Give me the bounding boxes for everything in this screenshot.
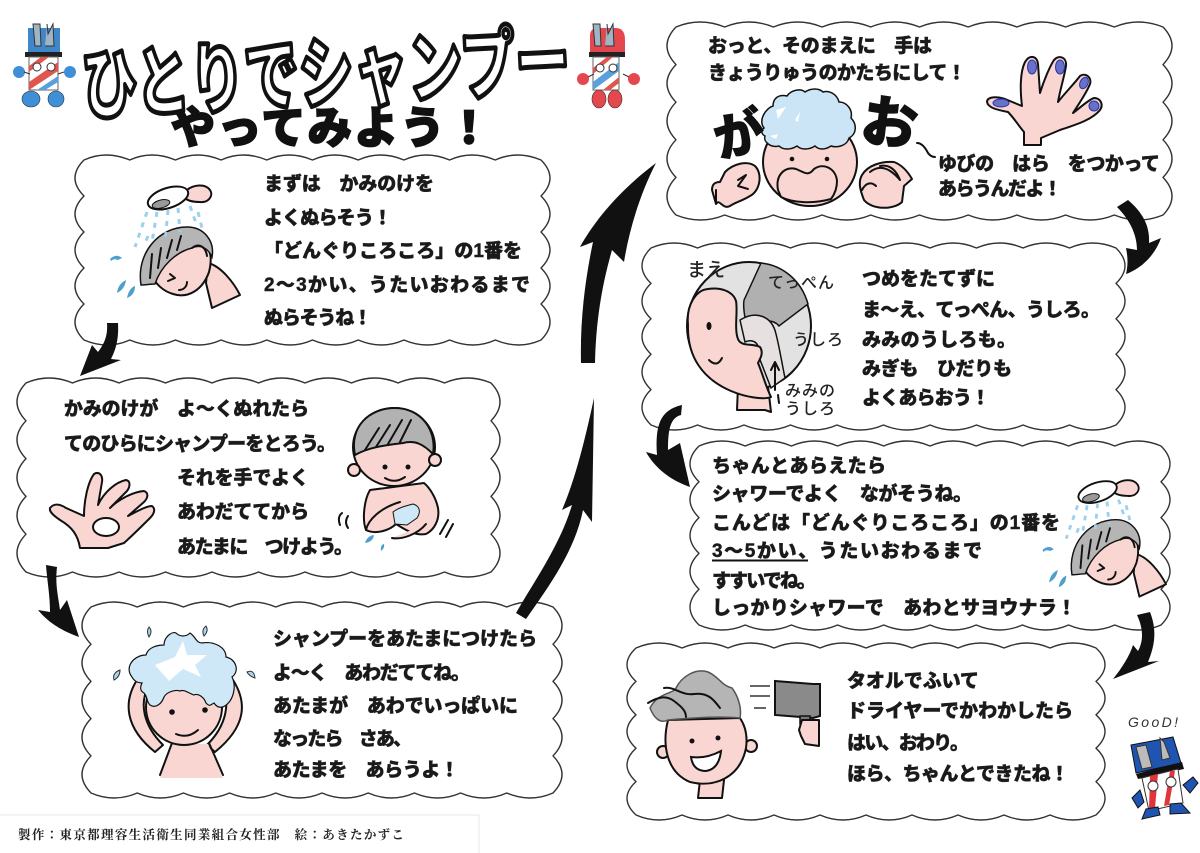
panel 4: dinosaur hands	[667, 22, 1172, 220]
text: step 5: よくあらおう！	[862, 387, 990, 409]
footer: credits	[0, 815, 479, 853]
text: step 4: ゆびの はら をつかって	[938, 153, 1160, 175]
text: step 6: すすいでね。	[712, 570, 816, 592]
text: step 1: 2〜3かい、うたいおわるまで	[264, 274, 530, 296]
text: step 6	[712, 455, 1076, 619]
text: step 1: 「どんぐりころころ」の1番を	[264, 239, 522, 262]
text: step 2: かみのけが よ〜くぬれたら	[64, 397, 309, 420]
mascot: GOOD character	[1128, 714, 1198, 819]
text: step 7: タオルでふいて	[847, 670, 979, 692]
icon: child lathering hands	[339, 408, 453, 551]
icon: tilde connector	[917, 143, 935, 157]
labels: head zones: てっぺん	[768, 275, 834, 292]
panel 7: dry	[627, 643, 1105, 820]
labels: head zones	[687, 260, 843, 418]
panel 3: lather up	[82, 602, 562, 798]
icon: hand with blue fingertips	[987, 57, 1102, 145]
text: step 2: てのひらにシャンプーをとろう。	[64, 433, 336, 455]
text: step 2: あたまに つけよう。	[177, 536, 353, 558]
text: step 4: あらうんだよ！	[938, 178, 1062, 200]
text: step 7: はい、おわり。	[847, 732, 969, 754]
text: step 4: きょうりゅうのかたちにして！	[708, 62, 966, 84]
text: step 2	[64, 397, 353, 558]
arrow: step 3 up	[516, 398, 594, 619]
text: step 1: まずは かみのけを	[264, 172, 434, 195]
text: step 3: シャンプーをあたまにつけたら	[273, 628, 537, 650]
text: step 3: なったら さあ、	[273, 728, 412, 750]
text: step 3: あたまを あらうよ！	[273, 759, 459, 781]
text: step 6: しっかりシャワーで あわとサヨウナラ！	[712, 597, 1076, 619]
icon: hair dryer	[750, 681, 820, 746]
mascot: GOOD character: GooD!	[1128, 714, 1178, 730]
panel 2: take shampoo	[17, 378, 500, 577]
title: ひとりでシャンプー: ひとりでシャンプー	[80, 17, 572, 131]
icon: child drying hair	[648, 671, 757, 798]
text: step 5: みぎも ひだりも	[862, 357, 1012, 380]
text: step 4	[708, 34, 1160, 200]
mascot: red barber pole	[577, 24, 640, 108]
text: step 1	[264, 172, 530, 329]
diagram: head zones	[687, 262, 811, 412]
arrow: up to step 4	[580, 163, 656, 363]
icon: foam-haired child roaring	[712, 89, 912, 208]
arrow: step 1 to 2	[80, 323, 121, 376]
text: step 4: おっと、そのまえに 手は	[708, 34, 932, 57]
text: step 6: ちゃんとあらえたら	[712, 455, 886, 477]
arrow: step 6 to 7	[1113, 612, 1159, 679]
labels: head zones: まえ	[687, 260, 725, 281]
panel 5: how to scrub	[642, 243, 1125, 430]
panel 6: rinse	[690, 441, 1170, 630]
text: step 5: ま〜え、てっぺん、うしろ。	[862, 299, 1100, 321]
icon: palm with shampoo	[50, 473, 154, 548]
text: step 3: あたまが あわでいっぱいに	[273, 694, 518, 717]
labels: head zones: みみの	[785, 383, 835, 400]
footer: credits: 製作：東京都理容生活衛生同業組合女性部 絵：あきたかずこ	[18, 827, 404, 842]
text: step 5: みみのうしろも。	[862, 329, 1016, 351]
text: step 6: こんどは「どんぐりころころ」の1番を	[712, 511, 1060, 534]
text: step 7	[847, 670, 1073, 785]
text: step 5	[862, 267, 1100, 409]
labels: head zones: うしろ	[785, 401, 835, 418]
text: step 1: ぬらそうね！	[264, 307, 372, 329]
icon: child under shower	[110, 182, 240, 308]
labels: head zones: うしろ	[793, 332, 843, 349]
text: step 1: よくぬらそう！	[264, 207, 392, 229]
text: step 2: あわだててから	[177, 501, 309, 523]
text: step 2: それを手でよく	[177, 466, 309, 489]
subtitle: やってみよう: やってみよう！	[171, 104, 491, 153]
icon: child with foamy head	[114, 626, 255, 778]
text: big roar お: お	[857, 88, 922, 159]
text: step 6: シャワーでよく ながそうね。	[712, 482, 972, 505]
text: step 3: よ〜く あわだててね。	[273, 662, 470, 684]
icon: child rinsing in shower	[1042, 477, 1166, 597]
arrow: step 5 to 6	[646, 405, 690, 487]
arrow: step 2 to 3	[38, 565, 79, 637]
text: step 6: 3〜5かい、うたいおわるまで	[712, 540, 982, 562]
arrow: step 4 to 5	[1117, 200, 1161, 274]
text: step 7: ドライヤーでかわかしたら	[847, 700, 1073, 722]
mascot: blue barber pole	[13, 24, 76, 107]
text: step 5: つめをたてずに	[862, 267, 995, 290]
text: step 3	[273, 628, 537, 781]
text: step 7: ほら、ちゃんとできたね！	[847, 763, 1069, 785]
panel 1: wet your hair	[75, 155, 550, 345]
text: big roar が: が	[708, 102, 770, 169]
